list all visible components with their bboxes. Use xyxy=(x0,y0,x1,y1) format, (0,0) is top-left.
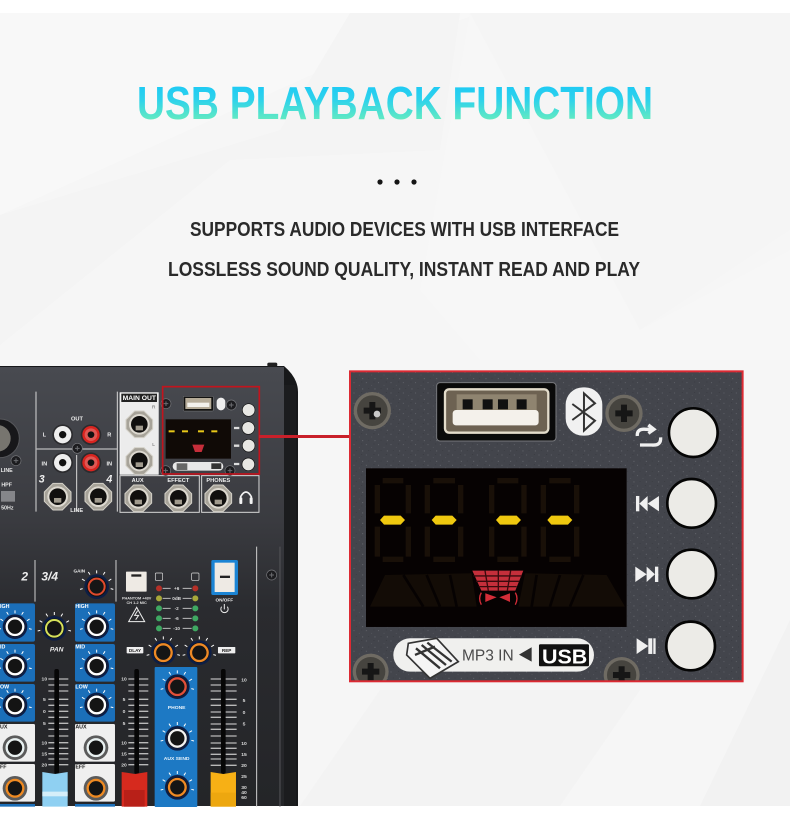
red spectrum bars xyxy=(472,571,523,591)
HPF switch: HPF xyxy=(1,482,13,488)
fader scales xyxy=(48,679,237,765)
delay and repeat knobs: REP xyxy=(222,648,231,653)
fader labels: 0 xyxy=(123,709,126,715)
EQ strips: UX xyxy=(0,725,8,731)
level meter: 0dB xyxy=(172,596,182,601)
center blue strip: PHONE xyxy=(168,705,186,711)
red speaker icon xyxy=(480,593,517,605)
main out panel: R xyxy=(152,405,156,411)
HPF switch: 50Hz xyxy=(1,506,14,512)
aux and effect jacks: AUX xyxy=(132,478,144,484)
gain knob xyxy=(74,569,113,599)
RCA outputs: L xyxy=(43,433,47,439)
EQ strips: MID xyxy=(75,644,85,650)
fader labels: 10 xyxy=(241,678,247,684)
RCA outputs xyxy=(43,416,111,453)
RCA outputs: OUT xyxy=(71,416,84,422)
fader labels: 10 xyxy=(241,741,247,747)
fader labels: 20 xyxy=(241,763,247,769)
panel screw xyxy=(267,570,277,580)
fader labels: 5 xyxy=(123,697,126,703)
phantom power button: PHANTOM +48V xyxy=(122,597,152,601)
EQ strips: LOW xyxy=(75,685,89,691)
fader labels: 10 xyxy=(42,677,47,683)
connector line xyxy=(259,435,350,438)
fader labels: 25 xyxy=(241,774,247,780)
fader labels: 20 xyxy=(121,762,127,768)
channel labels: 2 xyxy=(20,570,28,584)
main out panel: MAIN OUT xyxy=(123,396,156,402)
channel labels xyxy=(20,570,58,584)
fader labels: 0 xyxy=(43,709,46,715)
fader caps xyxy=(42,772,236,807)
screws xyxy=(353,392,643,693)
on/off switch xyxy=(211,560,238,613)
red highlight box xyxy=(163,387,259,474)
center blue strip: AUX SEND xyxy=(164,756,190,762)
EQ strips: EFF xyxy=(75,765,86,771)
USB module thumbnail xyxy=(161,396,255,476)
phones jack: PHONES xyxy=(206,478,230,484)
phantom power button xyxy=(122,572,152,622)
main out panel: L xyxy=(152,442,155,448)
title: USB PLAYBACK FUNCTION xyxy=(137,77,653,129)
fader labels: 40 xyxy=(241,790,247,796)
EQ knobs xyxy=(0,610,113,801)
fader labels: 5 xyxy=(243,698,246,704)
main out panel xyxy=(120,393,158,474)
HPF switch: LINE xyxy=(1,468,13,474)
level meter: -10 xyxy=(173,626,180,631)
lower control panel xyxy=(0,547,280,807)
MP3 IN USB label: MP3 IN xyxy=(462,648,514,665)
level meter: -6 xyxy=(175,616,179,621)
RCA inputs and line jacks: 3 xyxy=(39,474,45,486)
module panel xyxy=(350,371,743,681)
subtitle text: SUPPORTS AUDIO DEVICES WITH USB INTERFACE xyxy=(190,219,619,241)
level meter: -2 xyxy=(175,606,179,611)
fader labels: 60 xyxy=(241,795,247,801)
pan knob: PAN xyxy=(50,647,64,654)
RCA inputs and line jacks: IN xyxy=(106,461,112,467)
aux and effect jacks: EFFECT xyxy=(167,478,190,484)
phones jack xyxy=(205,478,253,512)
fader labels: 30 xyxy=(241,785,247,791)
LED display xyxy=(366,468,627,627)
inactive spectrum fan xyxy=(370,573,625,607)
channel labels: 3/4 xyxy=(41,570,58,584)
EQ strips: IGH xyxy=(0,604,10,610)
mixer body xyxy=(0,366,298,806)
USB module close-up xyxy=(350,371,743,693)
EQ strips: AUX xyxy=(75,725,87,731)
fader labels: 5 xyxy=(243,722,246,728)
HPF switch xyxy=(1,468,15,512)
fader labels: 5 xyxy=(43,721,46,727)
delay and repeat knobs xyxy=(127,636,235,665)
EQ strips: HIGH xyxy=(75,604,89,610)
three dots divider xyxy=(377,179,417,185)
aux and effect jacks xyxy=(125,478,192,512)
center blue strip xyxy=(155,667,197,807)
fader labels: 5 xyxy=(43,697,46,703)
RCA inputs and line jacks: 4 xyxy=(105,474,112,486)
upper control panel xyxy=(0,363,277,584)
XLR input xyxy=(0,419,21,466)
EQ strips: ID xyxy=(0,644,5,650)
active yellow segments xyxy=(380,516,572,525)
phantom power button: CH 1-2 MIC xyxy=(127,601,147,605)
fader labels: 10 xyxy=(42,740,47,746)
gain knob: GAIN xyxy=(74,569,86,574)
fader labels: 10 xyxy=(121,677,127,683)
fader labels: 15 xyxy=(241,752,247,758)
level meter: +6 xyxy=(174,586,180,591)
on/off switch: ON/OFF xyxy=(216,597,233,602)
RCA inputs and line jacks xyxy=(39,452,112,514)
inactive digit segments xyxy=(377,481,577,559)
RCA inputs and line jacks: LINE xyxy=(70,508,83,514)
control icons xyxy=(635,425,661,654)
MP3 IN USB label: USB xyxy=(542,645,587,668)
mixer product xyxy=(0,363,298,807)
level meter xyxy=(155,573,199,631)
fader labels xyxy=(42,677,247,801)
Bluetooth badge xyxy=(566,387,602,436)
EQ strips: FF xyxy=(0,765,7,771)
subtitle text xyxy=(168,219,641,281)
fader labels: 10 xyxy=(121,740,127,746)
fader labels: 20 xyxy=(42,762,47,768)
round buttons xyxy=(666,408,718,670)
USB port xyxy=(437,383,556,441)
fader labels: 0 xyxy=(243,710,246,716)
MP3 IN USB label xyxy=(393,638,594,678)
EQ strips xyxy=(0,603,115,807)
fader slots xyxy=(54,669,226,774)
fader labels: 15 xyxy=(42,751,47,757)
pan knob xyxy=(38,612,71,654)
EQ strips: OW xyxy=(0,685,10,691)
RCA inputs and line jacks: IN xyxy=(42,461,47,467)
fader labels: 15 xyxy=(121,751,127,757)
delay and repeat knobs: DLAY xyxy=(129,648,142,653)
subtitle text: LOSSLESS SOUND QUALITY, INSTANT READ AND PLAY xyxy=(168,259,641,281)
RCA outputs: R xyxy=(107,433,111,439)
fader labels: 5 xyxy=(123,721,126,727)
red frame xyxy=(350,371,743,681)
